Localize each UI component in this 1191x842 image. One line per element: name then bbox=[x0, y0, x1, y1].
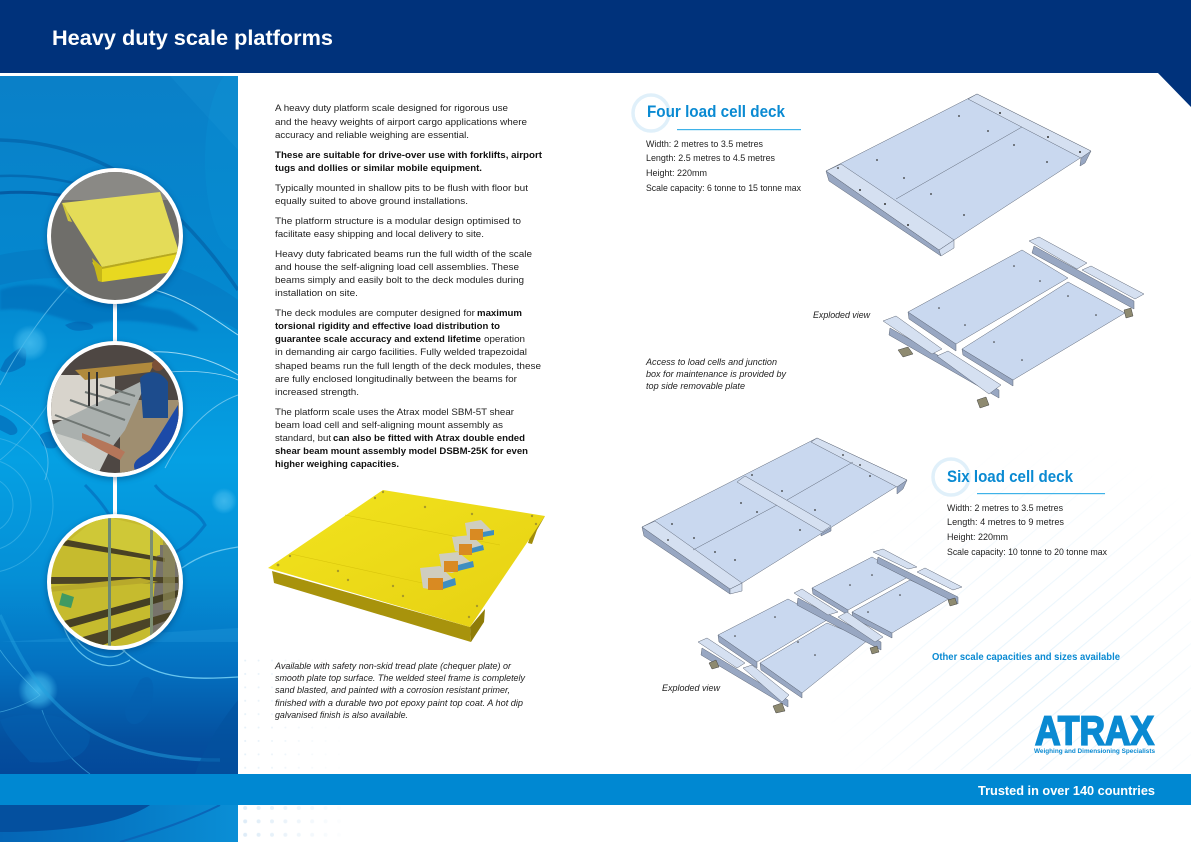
background diagonal line pattern bbox=[888, 510, 1191, 770]
heading rule bbox=[977, 493, 1105, 494]
photo circle: yellow beams stacked bbox=[45, 514, 185, 653]
load cell paragraph: beam load cell and self-aligning mount assembly as bbox=[275, 419, 503, 430]
other capacities note: Other scale capacities and sizes available bbox=[932, 652, 1120, 663]
finish caption: finished with a durable two pot epoxy paint top coat. A hot dip bbox=[275, 698, 523, 708]
four load cell deck assembled drawing bbox=[826, 94, 1091, 256]
six load cell specifications: Width: 2 metres to 3.5 metres bbox=[947, 503, 1063, 513]
maintenance access note: top side removable plate bbox=[646, 381, 745, 391]
four load cell specifications: Length: 2.5 metres to 4.5 metres bbox=[646, 153, 775, 163]
four load cell specifications: Width: 2 metres to 3.5 metres bbox=[646, 139, 763, 149]
finish caption: galvanised finish is also available. bbox=[275, 710, 408, 720]
background dot pattern bbox=[243, 660, 314, 837]
load cell paragraph: shear beam mount assembly model DSBM-25K for even bbox=[275, 445, 528, 456]
finish caption bbox=[274, 661, 526, 720]
load cell paragraph: higher weighing capacities. bbox=[275, 458, 399, 469]
six load cell specifications: Length: 4 metres to 9 metres bbox=[947, 517, 1064, 527]
deck modules paragraph: guarantee scale accuracy and extend lifetime bbox=[275, 333, 481, 344]
beams paragraph: Heavy duty fabricated beams run the full width of the scale bbox=[275, 248, 532, 259]
six load cell specifications: Height: 220mm bbox=[947, 532, 1008, 542]
four load cell specifications bbox=[646, 139, 801, 193]
deck modules paragraph: are fully enclosed longitudinally between the beams for bbox=[275, 373, 517, 384]
deck modules paragraph: shaped beams run the full length of the deck modules, these bbox=[275, 360, 541, 371]
panel: globe background bbox=[0, 76, 238, 842]
footer strapline: Trusted in over 140 countries bbox=[978, 783, 1155, 798]
six load cell specifications: Scale capacity: 10 tonne to 20 tonne max bbox=[947, 547, 1107, 557]
icon: heading ring four load cell bbox=[633, 95, 669, 131]
connector lines between photos bbox=[113, 300, 117, 518]
beams paragraph: beams simply and easily bolt to the deck modules during bbox=[275, 274, 524, 285]
modular paragraph: facilitate easy shipping and local delivery to site. bbox=[275, 228, 484, 239]
finish caption: sand blasted, and painted with a corrosion resistant primer, bbox=[275, 685, 510, 695]
six load cell deck assembled drawing bbox=[642, 438, 907, 594]
deck modules paragraph: operation bbox=[484, 333, 525, 344]
heading: four load cell deck: Four load cell deck bbox=[647, 103, 786, 121]
maintenance access note: box for maintenance is provided by bbox=[646, 369, 787, 379]
load cell paragraph: The platform scale uses the Atrax model SBM-5T shear bbox=[275, 406, 514, 417]
header banner bbox=[0, 0, 1191, 107]
heading rule bbox=[677, 129, 801, 130]
four load cell specifications: Scale capacity: 6 tonne to 15 tonne max bbox=[646, 183, 801, 193]
load cell paragraph bbox=[275, 406, 528, 469]
deck modules paragraph: The deck modules are computer designed for bbox=[275, 307, 475, 318]
intro text: A heavy duty platform scale designed for rigorous use bbox=[275, 102, 508, 113]
beams paragraph: and house the self-aligning load cell assemblies. These bbox=[275, 261, 519, 272]
modular paragraph: The platform structure is a modular design optimised to bbox=[275, 215, 521, 226]
load cell paragraph: can also be fitted with Atrax double ended bbox=[333, 432, 525, 443]
title: Heavy duty scale platforms bbox=[52, 27, 333, 50]
four load cell specifications: Height: 220mm bbox=[646, 168, 707, 178]
bold usage note: These are suitable for drive-over use with forklifts, airport bbox=[275, 149, 542, 160]
mounting paragraph: Typically mounted in shallow pits to be flush with floor but bbox=[275, 182, 528, 193]
photo circle: workers with trough beam bbox=[45, 340, 190, 480]
six load cell deck exploded drawing bbox=[698, 549, 962, 713]
icon: heading ring six load cell bbox=[933, 459, 969, 495]
mounting paragraph bbox=[275, 182, 528, 206]
deck modules paragraph: increased strength. bbox=[275, 386, 359, 397]
exploded view label: Exploded view bbox=[662, 683, 721, 693]
deck modules paragraph bbox=[275, 307, 541, 397]
load cell paragraph: standard, but bbox=[275, 432, 331, 443]
four load cell deck exploded drawing bbox=[883, 237, 1144, 408]
photo circle: yellow platform on floor bbox=[45, 168, 185, 307]
deck modules paragraph: torsional rigidity and effective load distribution to bbox=[275, 320, 500, 331]
finish caption: smooth plate top surface. The welded steel frame is completely bbox=[275, 673, 526, 683]
mounting paragraph: equally suited to above ground installations. bbox=[275, 195, 468, 206]
yellow platform with load cells bbox=[268, 490, 545, 642]
exploded view label: Exploded view bbox=[813, 310, 871, 320]
bold usage note: tugs and dollies or similar mobile equipment. bbox=[275, 162, 482, 173]
bold usage note bbox=[275, 149, 542, 173]
beams paragraph: installation on site. bbox=[275, 287, 358, 298]
maintenance access note bbox=[645, 357, 787, 391]
intro text: accuracy and reliable weighing are essential. bbox=[275, 129, 469, 140]
logo: Atrax: ATRAX bbox=[1035, 708, 1154, 754]
beams paragraph bbox=[275, 248, 532, 298]
deck modules paragraph: in demanding air cargo facilities. Fully welded trapezoidal bbox=[275, 346, 527, 357]
maintenance access note: Access to load cells and junction bbox=[645, 357, 777, 367]
modular paragraph bbox=[275, 215, 521, 239]
heading: six load cell deck: Six load cell deck bbox=[947, 468, 1074, 486]
logo: Atrax: Weighing and Dimensioning Specialists bbox=[1034, 748, 1155, 755]
six load cell specifications bbox=[947, 503, 1107, 557]
intro text bbox=[275, 102, 527, 140]
deck modules paragraph: maximum bbox=[477, 307, 522, 318]
footer band bbox=[0, 774, 1191, 805]
finish caption: Available with safety non-skid tread plate (chequer plate) or bbox=[274, 661, 512, 671]
intro text: and the heavy weights of airport cargo applications where bbox=[275, 116, 527, 127]
